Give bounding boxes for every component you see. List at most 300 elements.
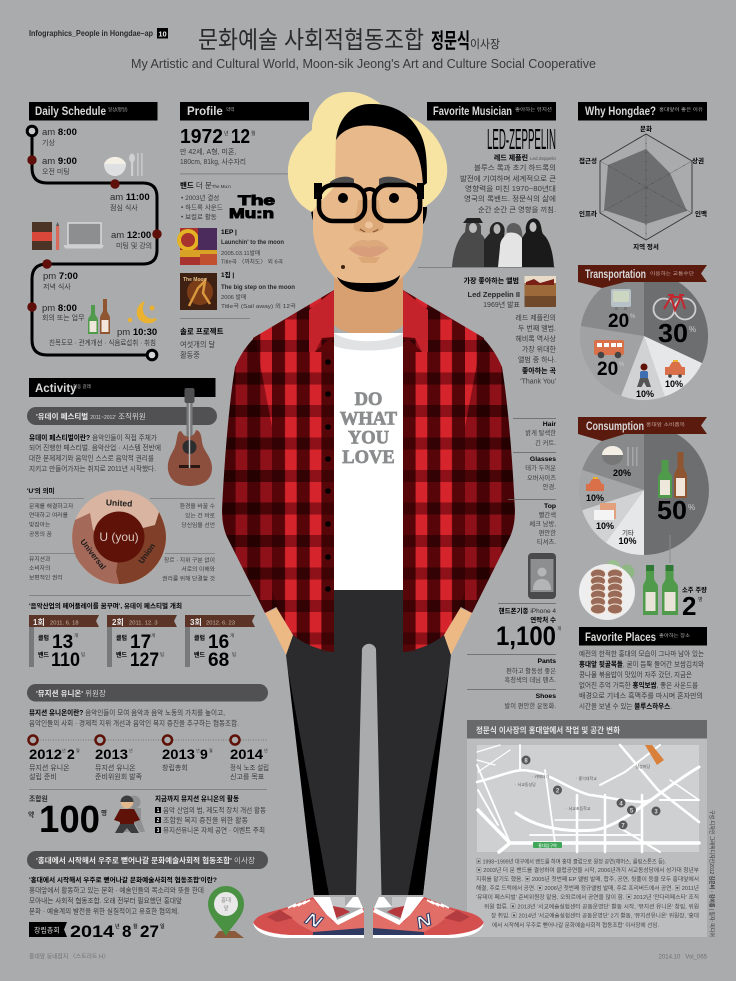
heading: why Hongdae [578,102,707,120]
schedule entries: 친목도모 · 관계개선 · 식음료섭취 · 취침 [49,338,156,347]
text: favorite places: 배경으로 기네스 흑맥주를 마시며 혼자만의 [579,691,703,700]
album text: Title곡 (Sail away) 외 12곡 [221,303,297,310]
text: U-day description: 유데이 페스티벌이란? 음악인들이 직접 주체가 [29,433,158,442]
schedule entries: am 11:00 [110,192,150,203]
icon: moon and stars [128,303,156,322]
text: band description [460,153,557,214]
text: U notes left: 문제를 해결하고자 [29,502,74,510]
album text: 2006 발매 [221,293,246,301]
text: favorite album: 1969년 발표 [483,300,521,309]
festival 2: 팀 [160,651,164,657]
text: favorite album: 가장 좋아하는 앨범 [464,276,519,285]
map: · 홍익대학교 [576,775,597,781]
right hand [444,608,472,655]
subtitle: My Artistic and Cultural World, Moon-sik Jeong's Art and Culture Social Cooperative [131,56,596,71]
union timeline: 2014 [230,746,263,762]
pie chart: transportation [580,272,708,400]
stat: union members: 명 [101,808,107,817]
pants [286,590,451,895]
festival 1 [29,615,99,671]
map: 2 [556,788,560,794]
t-shirt slogan: WHAT [340,410,398,430]
icon: map pin [208,886,244,938]
union timeline [28,736,269,781]
text: meaning of U: 'U'의 의미 [27,486,55,495]
diagram: U circle: Union [137,542,157,565]
album art: Led Zeppelin II [524,276,556,307]
labels: consumption shares: % [688,503,695,512]
note: glasses [525,456,556,491]
radar chart: 인맥 [695,209,707,218]
band info: • 2003년 결성 [181,193,219,202]
text: career history: '유데이 페스티벌' 준비위원장 맡음, 오뙤르에서 공연을 많이 함. ▣ 2012년 '잔다리페스타' 조직 [476,893,699,901]
neck [334,270,403,335]
festival 1: 2011. 6. 18 [50,620,79,626]
map: 4 [619,801,623,807]
festival 1: 개 [74,632,78,639]
text: career history: ▣ 1998~1999년 대구에서 밴드를 하며 홍대 클럽으로 원정 공연(재머스, 롤링스톤즈 등). [476,858,666,866]
map: · 서교초등학교 [566,805,591,811]
icon: taxi [665,360,685,378]
heading: favorite musician: 좋아하는 뮤지션 [515,106,552,113]
text: U notes left [29,502,74,582]
heading: why Hongdae: 홍대앞이 좋은 이유 [659,106,703,113]
heading: consumption: Consumption [586,421,644,433]
union timeline: 2013 [95,746,128,762]
founding date: 2014 [70,922,115,941]
icon: ticket stack [594,503,616,520]
text: career history: 위원 합류. ▣ 2013년 '서교예술실험센터 공동운영단' 활동 시작, '뮤지션 유니온' 창립, 위원 [484,902,699,910]
union timeline: 2 [67,746,75,762]
schedule entries: 회의 또는 업무 [42,313,85,322]
labels: transportation shares: 20 [608,311,629,332]
note: glasses: 오버사이즈 [527,473,556,482]
band logo: Mu:n [229,205,274,221]
text: union activities [155,794,267,834]
footer right: 2014.10 Vol_065 [659,954,708,960]
labels: transportation shares: 10% [665,379,683,389]
EP text: 1EP | [221,229,237,236]
union timeline: 2012 [29,746,62,762]
labels: consumption shares: 10% [618,536,637,546]
text: career history [476,858,699,929]
text: favorite places: 홍대앞 뒷골목들, 굴이 듬뿍 들어간 보쌈김치와 [579,660,705,668]
text: U-day description: 되어 진행한 페스티벌. 음악산업 · 시스템 전반에 [29,443,161,452]
festival 2: 17 [130,632,151,653]
stat: soju capacity: 2 [682,591,696,621]
text: U notes right: 환경을 바꿀 수 [180,502,216,510]
title: 이사장 [470,38,500,51]
festival 2: 개 [151,632,155,639]
glasses [316,185,422,221]
text: cooperative description: 홍대앞에서 활동하고 있는 문화 · 예술인들의 목소리와 뜻을 한데 [29,886,204,894]
stat: phone contacts: 핸드폰기종 iPhone 4 [499,606,556,615]
union timeline: 뮤지션 유니온 [95,763,136,772]
note: hair: 밝게 탈색한 [525,428,556,437]
text: album description: 가장 위대한 [522,344,557,354]
panel: consumption [578,417,709,621]
union timeline: 2013 [162,746,195,762]
stat: phone contacts: 개 [557,625,561,632]
labels: consumption shares: 50 [657,495,687,525]
EP text: Title곡 〈까치도〉 외 6곡 [221,258,284,266]
left hand [265,608,293,655]
map: 5 [630,808,634,814]
schedule entries: 미팅 및 강의 [116,241,152,250]
icon: person [114,796,145,833]
note: top: 티셔츠. [537,537,556,546]
series label: 10 [158,30,167,38]
text: cooperative description: '홍대에서 시작해서 우주로 뻗어나갈 문화예술사회적 협동조합'이란? [29,875,217,884]
icon: notebook pencil laptop [32,222,104,250]
labels: consumption shares: 20% [613,468,631,478]
labels: consumption shares: 10% [596,521,614,531]
birth date: 180cm, 81kg, 사수자리 [180,157,246,166]
face [313,124,423,292]
map: 8 [524,758,528,764]
map: · 서교동성당 [515,781,536,787]
panel: map and career [467,720,707,937]
text: U notes left: 공동의 꿈 [29,530,53,538]
festival 1: 팀 [81,651,85,657]
band info: • 보컬로 활동 [181,212,217,221]
EP text: Launchin' to the moon [221,239,284,246]
text: U notes left: 연대하고 여러를 [29,511,69,519]
text: U-day description: 지키고 만들어가자는 취지로 2011년 시작했다. [29,464,156,473]
diagram: U circle: U (you) [99,530,139,544]
text: band description: 영국의 록밴드. 정문식의 삶에 [464,194,556,203]
festival 2: 127 [130,650,159,671]
festival 3: 팀 [232,651,236,657]
labels: consumption shares: 10% [586,493,604,503]
note: hair: 긴 커트. [535,438,556,447]
labels: transportation shares: 10% [636,389,654,399]
text: favorite places: 예전의 한적한 홍대의 모습이 그나마 남아 있는 [579,649,705,658]
union timeline: 년 [264,747,268,753]
text: union activities: 2 [157,818,160,824]
band logo: The [238,192,275,208]
heading: transportation: Transportation [585,269,646,281]
schedule entries: am 12:00 [111,230,151,241]
note: top [529,503,556,546]
text: union activities: 1 [157,808,160,814]
icon: phone [528,553,556,599]
schedule entries: pm 8:00 [42,303,77,314]
birth date: 1972 [180,126,223,148]
diagram: U circle: United [106,497,133,509]
note: shoes [504,693,556,710]
heading: activity: Activity [35,383,77,395]
diagram: U circle: Universal [78,537,108,571]
note: top: 빨간색 [539,510,556,519]
text: career history: 에서 시작해서 우주로 뻗어나갈 문화예술사회적 협동조합' 이사장에 선임. [492,921,659,929]
panel: activity [27,378,269,941]
note: shoes: 발이 편안한 운동화. [504,701,556,710]
heading: activity: 활동 갈래 [73,383,91,390]
vertical credit: 구성·디자인 그래픽디자인2012 김은비 · 김이름 | 필자: 미디어 [708,810,716,937]
panel: favorite places [579,627,707,710]
schedule entries: pm 10:30 [117,327,157,338]
birth date: 년 [224,130,229,137]
t-shirt slogan [340,390,398,468]
note: pants: 편하고 활동성 좋은 [506,666,556,675]
t-shirt slogan: DO [355,390,382,410]
text: band description: 순간 순간 큰 영향을 끼침. [478,205,556,214]
icon: consumption bottles [658,452,687,498]
festival 2 [107,615,177,671]
nose [354,200,383,233]
schedule entries: am 8:00 [42,127,77,138]
heading: profile [180,102,309,120]
pants shadow [288,670,449,895]
heading: why Hongdae: Why Hongdae? [585,106,656,118]
map: 홍대입구역 [538,842,557,848]
EP text: 2005.03.11발매 [221,249,260,257]
text: union activities: 뮤지션유니온 자체 공연 · 이벤트 주최 [163,826,265,834]
panel: favorite musician [418,102,557,386]
text: favorite places: 콩나물 볶음밥이 맛있어 자주 갔던, 지금은 [579,670,693,679]
icon: rice bowl and cutlery [104,153,143,176]
icon: map pin: 앞 [223,904,229,912]
festival 3: 3회 [190,617,202,627]
festival 3: 밴드 [194,651,206,659]
t-shirt slogan: YOU [348,428,389,448]
moustache and lips [347,240,390,250]
heading: favorite places: Favorite Places [585,632,656,644]
t-shirt slogan: LOVE [342,448,395,468]
text: album description: 헤비록 역사상 [515,334,557,343]
radar chart [579,124,707,251]
pill: U-day festival: '유데이 페스티벌 2011~2012' 조직위원 [36,411,146,421]
left shoe [253,897,364,938]
band info [180,180,231,221]
text: band description: 블루스 록과 초기 하드록의 [474,163,556,172]
text: band description: 레드 제플린 Led Zeppelin [494,153,556,162]
album art: first album [180,273,217,310]
icon: taxi small [586,477,604,491]
text: album description: 두 번째 앨범. [518,324,556,332]
text: U-day description: 대한 문제제기와 음악인 스스로 음악적 권리를 [29,454,155,462]
footer left: 홍대앞 동네잡지 〈스트리트 H〉 [29,952,109,960]
t-shirt [334,333,403,590]
schedule entries: 오전 미팅 [42,167,70,176]
note: pants: 흑청색의 데님 팬츠. [504,675,556,684]
note: glasses: 안경. [543,482,556,491]
festival 3: 클럽 [194,634,205,642]
text: favorite places: 없어진 추억 가득한 홍익보쌈, 좋은 사운드를 [579,680,699,690]
text: U notes right: 있는 건 바로 [185,512,216,520]
pill: musician union: '뮤지션 유니온' 위원장 [36,688,106,698]
text: U notes right: 당신임을 선언 [181,521,215,529]
founding date: 8 [122,922,131,941]
union timeline: 창립총회 [162,763,188,772]
labels: transportation shares: 30 [658,318,688,348]
series label: Infographics_People in Hongdae–ap [29,29,153,38]
radar chart: 상권 [692,156,704,165]
text: U notes left: 소비자의 [29,564,50,572]
festival 3: 16 [208,632,229,653]
founding date: 27 [140,922,159,941]
text: cooperative description: 문화 · 예술계의 발전을 위한 실질적이고 유효한 협의체. [29,906,179,916]
right shoe logo: N [416,909,433,934]
text: career history: 장 취임. ▣ 2014년 '서교예술실험센터 공동운영단' 2기 활동, '뮤지션유니온' 위원장, '홍대 [491,912,699,920]
heading: transportation: 이용하는 교통수단 [650,270,694,277]
icon: map pin: 홍대 [221,896,231,904]
text: U notes right: 서로의 이해와 [181,565,216,573]
union timeline: 년 [129,747,133,753]
solo project: 활동중 [180,350,200,360]
radar chart: 문화 [640,124,652,133]
founding date: 일 [160,923,165,930]
text: cooperative description: 모아내는 사회적 협동조합. 오래 전부터 필요했던 홍대앞 [29,896,183,905]
band info: • 하드록 사운드 [181,202,223,212]
schedule entries [42,127,157,347]
union timeline: 준비위원회 발족 [95,772,143,781]
note: hair: Hair [543,421,556,428]
festival 3 [185,615,255,671]
heading: favorite musician [427,102,556,120]
panel: transportation [578,265,708,400]
text: favorite places: 시간을 보낼 수 있는 블루스하우스. [579,702,672,710]
heading: profile: 약력 [226,106,234,113]
map: · 상상마당 [633,763,650,769]
note: pants: Pants [537,658,556,665]
title: 정문식 [431,30,470,53]
map [477,745,699,852]
text: U notes left: 보편적인 권리 [29,574,63,582]
note: top: Top [544,503,556,510]
union timeline: 뮤지션 유니온 [29,763,70,772]
text: album description: 좋아하는 곡 [522,366,557,375]
stat: phone contacts [496,606,561,651]
text: LED-ZEPPELIN [487,124,556,156]
labels: transportation shares: % [619,362,625,368]
left shoe: N [300,910,327,931]
solo project: 솔로 프로젝트 [180,326,224,336]
text: U notes left: 뮤지션과 [29,555,51,563]
stat: soju capacity [682,585,707,621]
labels: consumption shares: 기타 [622,528,634,537]
diagram: U circle [72,490,166,584]
solo project: 여섯개의 달 [180,340,215,349]
union timeline: 년 [196,747,200,753]
text: favorite places [579,649,705,710]
timeline [27,126,162,360]
note: glasses: 테가 두꺼운 [525,463,556,472]
radar chart: 인프라 [579,209,597,218]
festival 1: 1회 [33,617,45,627]
text: favorite album: Led Zeppelin II [467,290,520,299]
festival 1: 110 [51,650,80,671]
album text: The big step on the moon [221,284,295,291]
heading: consumption [578,417,707,441]
labels: transportation shares: % [689,325,696,334]
note: shoes: Shoes [536,693,556,700]
stat: phone contacts: 1,100 [496,621,556,651]
icon: rice and cutlery [602,446,638,466]
stat: union members: 100 [39,799,100,841]
text: union description: 음악인들의 사회 · 경제적 지위 개선과 음악인 복지 증진을 추구하는 협동조합. [29,718,239,728]
text: union description [29,708,239,728]
festival 3: 2012. 6. 23 [206,620,235,626]
heading: transportation [578,265,707,288]
text: U notes right: 권리를 위해 단결할 것 [162,574,215,582]
note: top: 편안한 [539,528,556,537]
icon: guitar [168,388,212,486]
text: U notes right: 장르 · 지위 구분 없이 [164,556,215,564]
founding date: 월 [133,923,138,930]
album art: first album: The Moon [183,277,207,283]
hair: black [336,104,427,186]
text: album description: 레드 제플린의 [515,313,556,322]
icon: bottles [88,299,110,334]
festival 2: 2011. 12. 3 [129,620,158,626]
heading: profile: Profile [187,106,223,118]
heading: map [467,720,707,738]
birth date: 만 42세, A형, 미혼, [180,147,236,156]
heading: favorite musician: Favorite Musician [433,106,512,118]
stat: soju capacity: 병 [698,596,703,603]
stat: soju capacity: 소주 주량 [682,585,707,594]
text: favorite album [464,276,521,309]
schedule entries: 기상 [42,138,55,147]
text: career history: ▣ 2003년 더 문 밴드를 결성하여 클럽공연을 시작, 2006년까지 서교동성당에서 성가대 청년부 [476,866,699,874]
EP text [221,229,284,266]
text: band description: 영향력을 미친 1970~80년대 [465,184,556,193]
schedule entries: pm 7:00 [43,271,78,282]
icon: walker [637,364,651,387]
text: album description [515,313,557,386]
icon: plate of meat [579,560,635,620]
heading: activity [29,378,216,397]
hair: blonde front [288,126,336,212]
festival 1: 밴드 [38,651,50,659]
eyebrows [330,177,410,186]
labels: consumption shares [586,468,695,546]
right shoe [373,897,484,938]
hair: blonde back [288,92,447,212]
icon: tram [611,289,631,310]
text: album description: 앨범 중 하나. [518,355,556,364]
solo project [180,326,224,360]
heading: favorite places: 좋아하는 장소 [659,632,690,639]
title: 문화예술 사회적협동조합 [198,27,424,54]
union timeline: 9 [200,746,208,762]
band info: 밴드 더 문The Mu:n [180,180,231,190]
stat: phone contacts: 연락처 수 [530,615,556,624]
stat: union members: 약 [28,810,35,819]
text: career history: 지휘를 맡기도 했음. ▣ 2005년 첫번째 EP 앨범 발매, 합주, 공연, 뒷풀이 등을 모두 홍대앞에서 [476,875,699,883]
festival 2: 클럽 [116,634,127,642]
album text: 1집 | [221,270,234,279]
festival 3: 개 [230,632,234,639]
text: U notes right [162,502,216,582]
schedule entries: 저녁 식사 [43,282,71,291]
beard and mole [337,275,400,292]
labels: transportation shares: % [630,314,636,320]
text: career history: 해결, 주로 드럭에서 공연. ▣ 2006년 첫번째 정규앨범 발매, 주로 프리버드에서 공연. ▣ 2011년 [476,884,699,892]
birth date: 월 [251,130,256,137]
pill: cooperative [27,851,268,869]
album text [221,270,297,310]
note: top: 체크 남방, [529,519,556,528]
union timeline: 년 [62,747,66,753]
heading: daily schedule: 일상(평일) [108,106,128,112]
heading: daily schedule [29,102,158,120]
icon: bicycle [654,295,696,320]
text: U notes left: 맞잡아는 [29,520,51,528]
pill: musician union [27,684,268,702]
